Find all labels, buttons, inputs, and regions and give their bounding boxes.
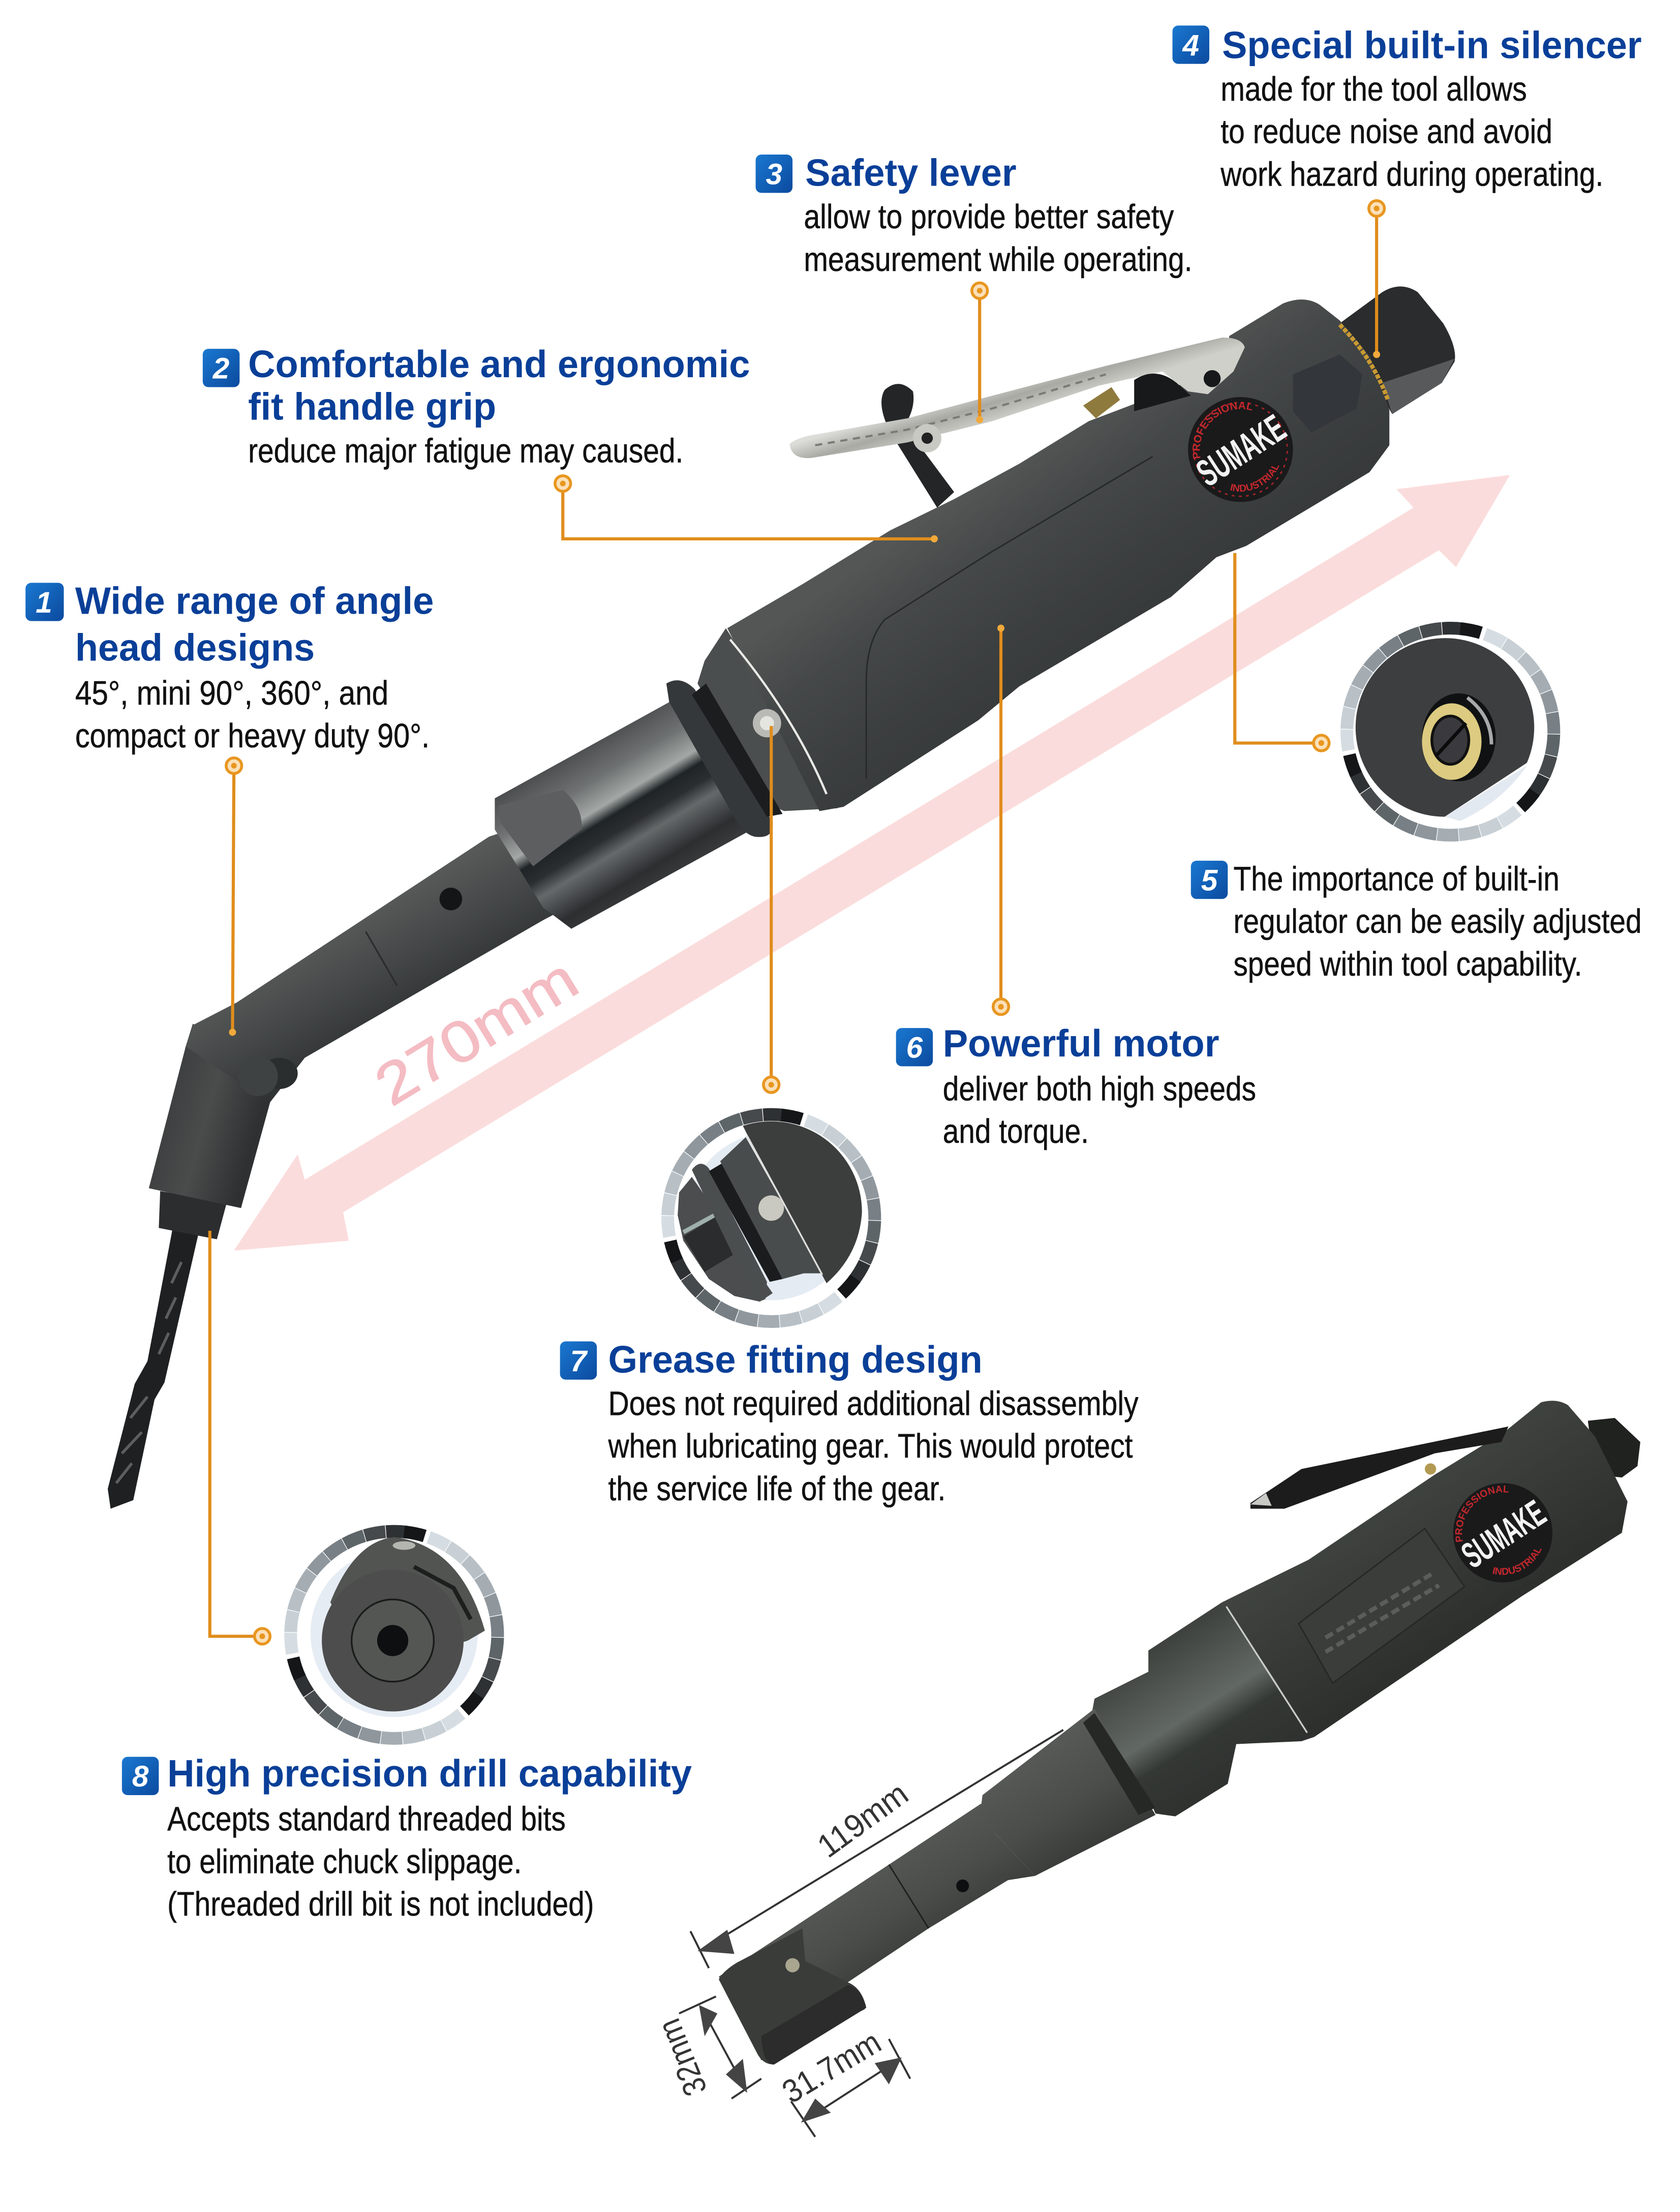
badge 7 [560, 1341, 597, 1380]
body 3: allow to provide better safety [804, 198, 1174, 236]
lever tip [1250, 1493, 1272, 1506]
logo badge [1453, 1483, 1553, 1582]
dimension: 31.7mm [776, 2023, 910, 2137]
black socket [1422, 693, 1495, 781]
badge 5: 5 [1201, 864, 1218, 897]
badge 4: 4 [1182, 29, 1199, 62]
body 4 [1220, 70, 1603, 193]
feature 5: regulator [1191, 860, 1642, 983]
head nut [761, 1985, 866, 2065]
badge 2 [203, 349, 239, 387]
detail circle: chuck [194, 1435, 594, 1835]
handle grip seam [866, 457, 1152, 778]
callout line 2 [555, 476, 938, 542]
feature 2: handle grip [203, 343, 750, 470]
body [1222, 1401, 1628, 1737]
heading 6: Powerful motor [943, 1022, 1219, 1065]
side pin [238, 1056, 298, 1096]
polished cylinder [495, 699, 757, 929]
end face [1356, 638, 1534, 817]
light crescent [311, 1550, 478, 1717]
body 2: reduce major fatigue may caused. [248, 432, 683, 470]
light crescent [1445, 766, 1527, 821]
handle body [727, 299, 1389, 811]
body 5 [1233, 860, 1642, 983]
arm tube [186, 830, 567, 1103]
body 1: 45°, mini 90°, 360°, and [75, 674, 388, 712]
logo badge: INDUSTRIAL [1492, 1549, 1542, 1575]
light crescent [688, 1133, 855, 1300]
grease nipple [758, 1195, 784, 1221]
angle head [149, 1024, 272, 1208]
secondary tool view [719, 1401, 1640, 2065]
label: 270mm: 270mm [364, 946, 589, 1118]
cylinder dark band [683, 1217, 740, 1272]
body 8 [167, 1800, 594, 1923]
heading 8: High precision drill capability [167, 1752, 692, 1795]
brass fitting [1425, 1463, 1436, 1475]
badge 1 [25, 583, 64, 621]
body 6: and torque. [943, 1112, 1089, 1150]
feature 8: drill capability [122, 1752, 692, 1923]
body 7: Does not required additional disassembly [608, 1385, 1139, 1423]
heading 2: fit handle grip [248, 385, 496, 428]
heading 1: Wide range of angle [75, 580, 434, 622]
tube seam [889, 1865, 929, 1928]
cylinder [678, 1177, 773, 1301]
feature 4: silencer [1173, 23, 1642, 193]
callout line 1 [226, 758, 242, 1036]
body 4: to reduce noise and avoid [1220, 113, 1552, 151]
heading 7: Grease fitting design [608, 1338, 983, 1381]
lever [1250, 1427, 1509, 1509]
dimension: 119mm [690, 1730, 1063, 1968]
data plate [1299, 1529, 1464, 1683]
tube hole [956, 1880, 969, 1892]
collar [697, 628, 838, 811]
arm hole [440, 888, 462, 911]
groove [709, 1163, 783, 1282]
bore [377, 1625, 408, 1656]
body 8: (Threaded drill bit is not included) [167, 1885, 594, 1923]
chuck face [322, 1570, 464, 1711]
callout line 7 [763, 726, 779, 1093]
body 7 [608, 1385, 1139, 1508]
cylinder highlight [683, 1215, 715, 1232]
dimension: 32mm [650, 1996, 761, 2101]
safety latch [881, 384, 954, 508]
badge 2: 2 [212, 352, 229, 385]
logo badge: INDUSTRIAL [1230, 465, 1279, 492]
drill bit [108, 1227, 198, 1509]
badge 3: 3 [766, 158, 782, 191]
black groove [692, 683, 783, 817]
dimension: 119mm: 119mm [811, 1775, 914, 1865]
heading 4: Special built-in silencer [1222, 23, 1642, 66]
body 3: measurement while operating. [804, 240, 1193, 279]
dimension: 32mm: 32mm [650, 2014, 714, 2101]
air fitting [1083, 387, 1120, 418]
arrow: 270mm length [234, 475, 1510, 1251]
body 1: compact or heavy duty 90°. [75, 717, 430, 755]
lever mount [1134, 370, 1220, 411]
neck [981, 1709, 1155, 1876]
logo badge: SUMAKE [1454, 1492, 1553, 1576]
head screw [785, 1958, 800, 1973]
gold silencer ring [1340, 325, 1388, 400]
body 1 [75, 674, 430, 755]
detail circle: grease fitting [571, 1018, 971, 1418]
flange [692, 1164, 767, 1301]
body 8: Accepts standard threaded bits [167, 1800, 566, 1838]
heading 2: Comfortable and ergonomic [248, 343, 750, 385]
screw slot [1436, 723, 1466, 756]
badge 6: 6 [906, 1032, 923, 1065]
badge 1: 1 [36, 586, 52, 619]
heading 1: head designs [75, 626, 315, 669]
chuck nut [159, 1191, 227, 1239]
front ring highlight [730, 640, 827, 794]
body 3 [804, 198, 1193, 279]
callout line 8 [210, 1231, 270, 1644]
detail circle: regulator [1250, 532, 1650, 931]
regulator screw [1432, 716, 1469, 764]
logo badge: PROFESSIONAL [1455, 1486, 1509, 1542]
badge 8 [122, 1757, 159, 1795]
logo badge: PROFESSIONAL [1193, 402, 1253, 459]
slot [414, 1567, 471, 1619]
badge 5 [1191, 861, 1228, 899]
badge 7: 7 [570, 1345, 588, 1378]
callout line 3 [972, 283, 988, 423]
body 8: to eliminate chuck slippage. [167, 1842, 522, 1881]
hex end [1588, 1418, 1640, 1477]
logo badge [1188, 397, 1293, 502]
inner ring [352, 1599, 434, 1682]
screw highlight [393, 1541, 415, 1550]
body 4: work hazard during operating. [1220, 155, 1603, 193]
segmented ring [1250, 532, 1650, 931]
body [743, 1122, 862, 1283]
collar [720, 1137, 822, 1279]
callout line 6 [993, 625, 1009, 1015]
heading 2 [248, 343, 750, 428]
neck ring [1083, 1713, 1155, 1815]
wrench flat [499, 790, 582, 866]
arm seam [366, 931, 397, 985]
body 4: made for the tool allows [1220, 70, 1527, 108]
head [719, 1928, 866, 2065]
main tool: angle drill [108, 287, 1475, 1529]
body 6 [943, 1070, 1256, 1150]
feature 7: grease fitting [560, 1338, 1139, 1508]
dimension: 31.7mm: 31.7mm [776, 2023, 887, 2110]
ring highlight [1227, 1607, 1307, 1733]
body 7: the service life of the gear. [608, 1470, 945, 1508]
badge 8: 8 [132, 1760, 149, 1793]
feature 6: motor [896, 1022, 1256, 1150]
logo badge: SUMAKE [1189, 406, 1293, 495]
heading 3: Safety lever [805, 151, 1017, 194]
silver rim [1468, 698, 1491, 744]
flange [666, 680, 773, 837]
feature 3: safety lever [756, 151, 1193, 279]
badge 3 [756, 155, 792, 193]
badge 4 [1173, 25, 1209, 64]
body 5: The importance of built-in [1233, 860, 1560, 898]
brass ring [1422, 703, 1482, 780]
head back [330, 1537, 485, 1673]
feature 1: angle heads [25, 580, 434, 755]
segmented ring [194, 1435, 594, 1835]
tube [719, 1804, 1035, 2061]
callout line 5 [1235, 553, 1329, 751]
vent panel [1293, 354, 1362, 433]
collar [1092, 1602, 1314, 1816]
body 5: speed within tool capability. [1233, 945, 1582, 983]
callout line 4 [1369, 201, 1384, 358]
throttle lever [789, 338, 1245, 458]
heading 1 [75, 580, 434, 669]
lever pivot [913, 424, 941, 452]
hexagon end cap [1340, 286, 1455, 414]
ring highlight [747, 1136, 822, 1275]
lower hex facet [1382, 359, 1455, 414]
grease fitting [753, 709, 781, 737]
segmented ring [571, 1018, 971, 1418]
body 7: when lubricating gear. This would protect [608, 1427, 1133, 1465]
body 6: deliver both high speeds [943, 1070, 1256, 1108]
badge 6 [896, 1028, 933, 1066]
